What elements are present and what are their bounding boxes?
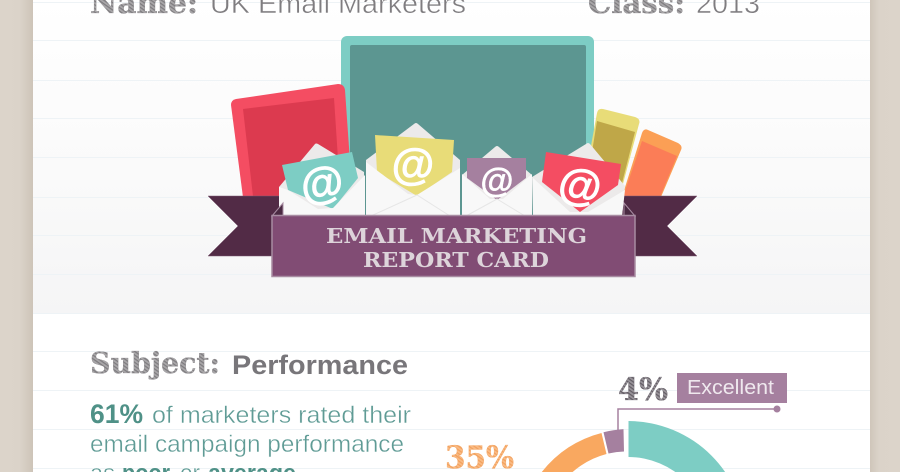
envelope purple [462, 146, 532, 216]
ribbon right [620, 196, 697, 256]
folder title [326, 224, 587, 272]
envelope yellow [366, 123, 460, 216]
label: 4% excellent [618, 372, 787, 430]
yellow letter: @ [392, 140, 434, 189]
ribbon left [208, 196, 285, 256]
subject heading: Subject: [90, 346, 220, 380]
illustration: report card folder [208, 36, 697, 276]
orange phone [622, 129, 682, 197]
subject heading: Performance [232, 350, 408, 380]
performance statement: of marketers rated their [152, 402, 411, 429]
segment: average 35% [519, 433, 606, 472]
subject heading [90, 346, 408, 380]
segment: excellent 4% [604, 429, 624, 454]
performance statement: email campaign performance [90, 431, 404, 458]
envelope red [532, 143, 625, 216]
teal letter: @ [297, 156, 347, 211]
teal tablet [341, 36, 594, 226]
performance statement [90, 399, 411, 472]
label: 4% excellent: Excellent [687, 377, 774, 399]
folder title: REPORT CARD [363, 248, 549, 272]
name field [90, 0, 466, 20]
folder title: EMAIL MARKETING [326, 224, 587, 248]
envelope teal [279, 144, 365, 216]
red tablet [231, 84, 353, 205]
segment: good [628, 421, 746, 472]
folder front [272, 203, 635, 276]
red letter: @ [555, 158, 605, 213]
envelope fold lines [371, 195, 450, 216]
purple letter: @ [480, 162, 514, 200]
class field [588, 0, 760, 20]
yellow phone [582, 109, 640, 195]
performance statement: 61% [90, 399, 143, 429]
label: 4% excellent: 4% [618, 372, 668, 408]
donut chart [519, 421, 746, 472]
